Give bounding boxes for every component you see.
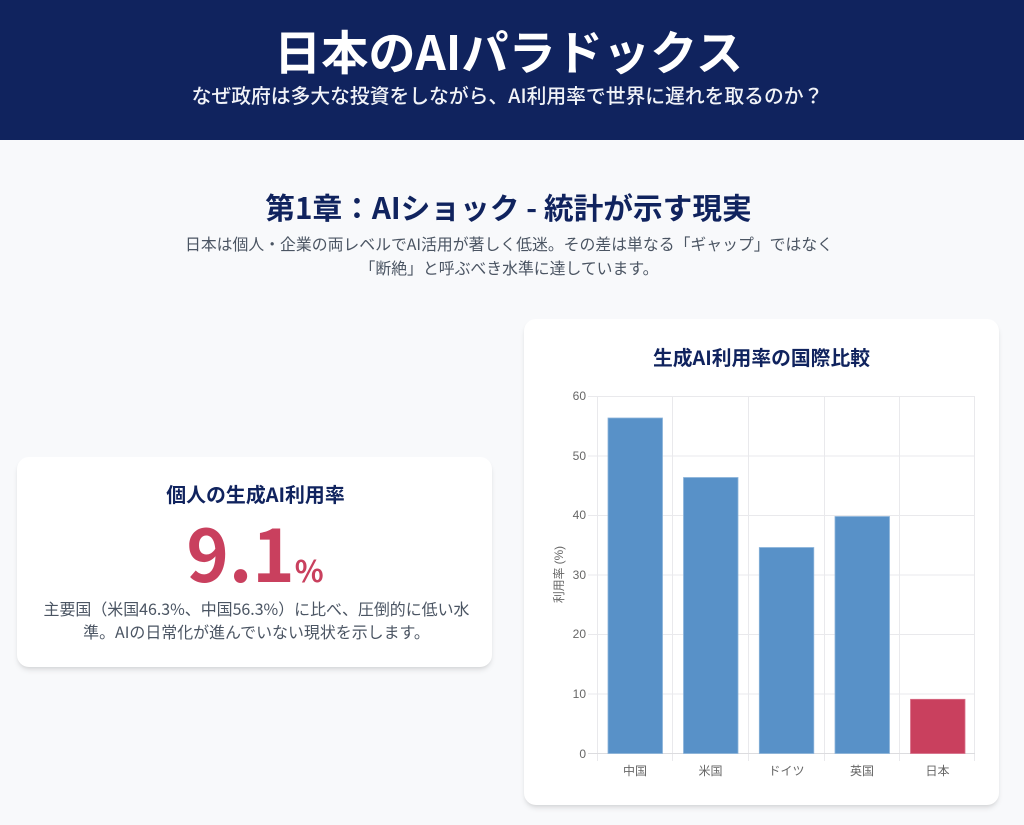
- stat description: [44, 596, 469, 643]
- chart heading: 生成AI利用率の国際比較: [653, 342, 870, 371]
- x axis country labels: 米国: [698, 764, 723, 778]
- bar: 英国: [835, 516, 890, 754]
- chapter intro text: 「断絶」と呼ぶべき水準に達しています。: [360, 256, 658, 278]
- bar: 日本: [910, 699, 965, 754]
- stat card heading: 個人の生成AI利用率: [166, 479, 345, 508]
- x axis country labels: 中国: [623, 763, 647, 778]
- big number 9.1%: 9.1%: [186, 498, 324, 603]
- panel: international comparison chart: [524, 319, 999, 805]
- y axis tick labels: 30: [573, 568, 586, 582]
- chapter intro text: [185, 232, 833, 278]
- bar: 中国: [608, 418, 662, 754]
- y axis tick labels: 10: [573, 687, 586, 701]
- y axis tick labels: [573, 389, 586, 761]
- panel: personal usage stat: [17, 457, 492, 667]
- chapter heading: 第1章：AIショック - 統計が示す現実: [265, 185, 752, 228]
- y axis tick labels: 60: [573, 389, 586, 403]
- x axis country labels: ドイツ: [768, 764, 805, 778]
- title: 日本のAIパラドックス: [274, 15, 743, 84]
- y axis tick labels: 50: [573, 449, 586, 463]
- y axis tick labels: 40: [573, 508, 586, 522]
- stat description: 主要国（米国46.3%、中国56.3%）に比べ、圧倒的に低い水: [44, 596, 469, 620]
- y axis tick labels: 20: [573, 627, 586, 641]
- subtitle: なぜ政府は多大な投資をしながら、AI利用率で世界に遅れを取るのか？: [192, 80, 823, 109]
- stat description: 準。AIの日常化が進んでいない現状を示します。: [83, 619, 430, 643]
- x axis country labels: 英国: [850, 764, 874, 778]
- bar: ドイツ: [759, 548, 814, 754]
- y axis tick labels: 0: [579, 747, 586, 761]
- bar: 米国: [684, 478, 738, 754]
- chapter intro text: 日本は個人・企業の両レベルでAI活用が著しく低迷。その差は単なる「ギャップ」ではなく: [185, 232, 833, 255]
- x axis country labels: 日本: [925, 764, 950, 778]
- x axis country labels: [623, 763, 950, 778]
- bar chart: [552, 389, 975, 778]
- header banner: [0, 0, 1024, 140]
- y axis title: 利用率 (%): [552, 546, 566, 603]
